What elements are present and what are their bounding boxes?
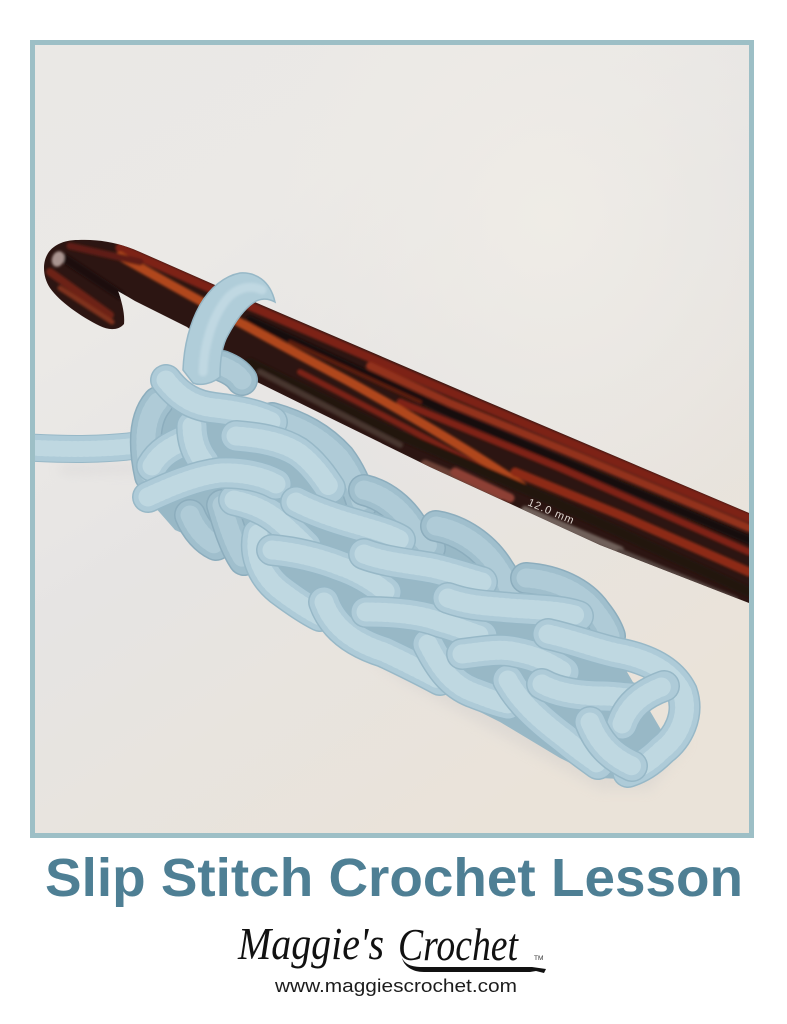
logo: Maggie's Crochet xyxy=(237,918,546,973)
icon: wooden crochet hook xyxy=(44,240,749,603)
top stitch bars xyxy=(148,380,630,698)
yarn underside band xyxy=(140,400,670,780)
panel: photo background with frame xyxy=(32,42,752,836)
icon: crochet hook underline xyxy=(402,958,546,973)
yarn tail xyxy=(20,444,150,449)
website url: www.maggiescrochet.com xyxy=(274,976,517,996)
title: Slip Stitch Crochet Lesson xyxy=(45,848,743,908)
hook size marking: 12.0 mm xyxy=(526,497,576,527)
working loop over hook xyxy=(183,273,275,384)
lower edge strands xyxy=(152,426,598,764)
logo: Maggie's Crochet: Maggie's xyxy=(237,918,384,969)
soft shadow beneath hook and yarn xyxy=(439,695,655,786)
logo: Maggie's Crochet: Crochet xyxy=(398,919,519,970)
back strands xyxy=(146,366,610,636)
foundation end curl xyxy=(548,634,685,772)
yarn: slip stitch chain xyxy=(20,273,685,780)
trademark: TM xyxy=(534,955,543,962)
